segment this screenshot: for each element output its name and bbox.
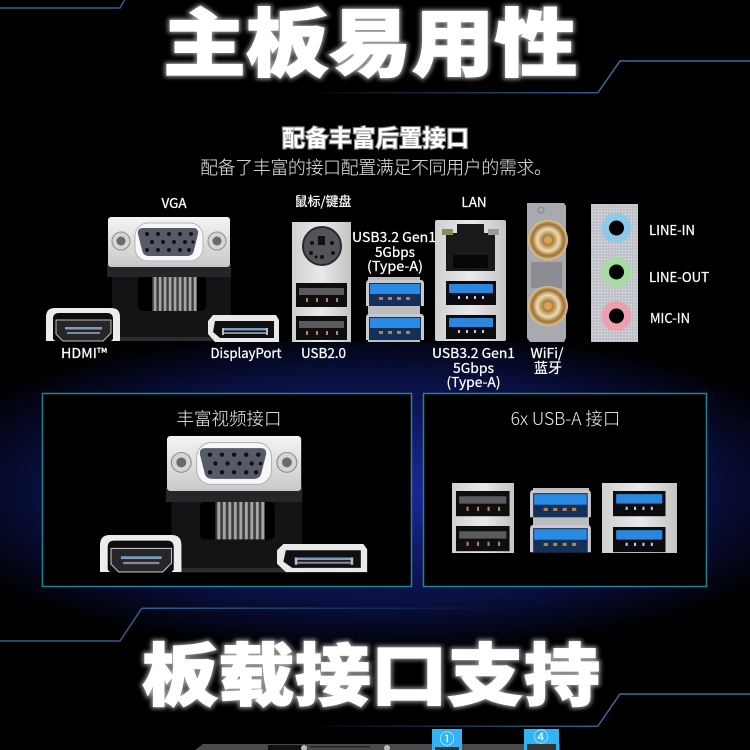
top right accent line xyxy=(300,61,750,94)
panel heading: USB ports: 6x USB-A 接口 xyxy=(511,406,620,431)
top left accent line xyxy=(0,0,125,8)
port labels: (Type-A) xyxy=(446,371,500,391)
port labels: 5Gbps xyxy=(375,241,415,261)
rear io: LAN + USB3.2 xyxy=(435,220,506,341)
panel: USB ports xyxy=(424,394,706,586)
lower right accent line xyxy=(300,694,750,727)
port labels: USB3.2 Gen1 xyxy=(432,342,515,362)
port labels: USB2.0 xyxy=(301,342,346,362)
port labels: 5Gbps xyxy=(453,357,494,377)
rear io: audio jacks xyxy=(591,204,638,342)
port labels: MIC-IN xyxy=(650,307,690,327)
port labels: LINE-OUT xyxy=(649,266,709,286)
rear io: WiFi antenna plate xyxy=(527,203,568,342)
panel heading: video ports: 丰富视频接口 xyxy=(176,406,282,431)
port labels xyxy=(61,191,709,391)
subheading: 配备丰富后置接口 xyxy=(282,119,469,153)
port labels: LINE-IN xyxy=(649,219,695,239)
rear io: VGA + HDMI + DisplayPort xyxy=(46,217,279,342)
port labels: VGA xyxy=(161,192,187,212)
callout marker 1: ① xyxy=(439,728,455,749)
port labels: 蓝牙 xyxy=(534,358,562,378)
title: 板载接口支持: 板载接口支持 xyxy=(142,621,600,720)
motherboard preview strip xyxy=(195,744,560,750)
callout marker 4 xyxy=(524,726,559,750)
port labels: HDMI™ xyxy=(61,342,107,362)
port labels: 鼠标/键盘 xyxy=(294,191,352,210)
callout marker 4: ④ xyxy=(533,726,549,747)
port labels: LAN xyxy=(461,191,487,211)
panel USB illustration xyxy=(452,483,677,553)
panel video illustration xyxy=(100,436,367,572)
port labels: DisplayPort xyxy=(210,342,282,362)
lower left accent line xyxy=(0,608,492,641)
rear io: PS/2 + USB2.0 xyxy=(292,222,351,342)
port labels: WiFi/ xyxy=(530,342,564,362)
panel: video ports xyxy=(42,394,412,586)
callout marker 1 xyxy=(432,728,462,750)
rear io: blue USB3.2 stack xyxy=(366,277,424,342)
port labels: USB3.2 Gen1 xyxy=(352,226,436,246)
title: 板载接口支持: 板载接口支持 xyxy=(142,621,600,720)
description: 配备了丰富的接口配置满足不同用户的需求。 xyxy=(200,154,552,180)
port labels: (Type-A) xyxy=(367,255,423,275)
